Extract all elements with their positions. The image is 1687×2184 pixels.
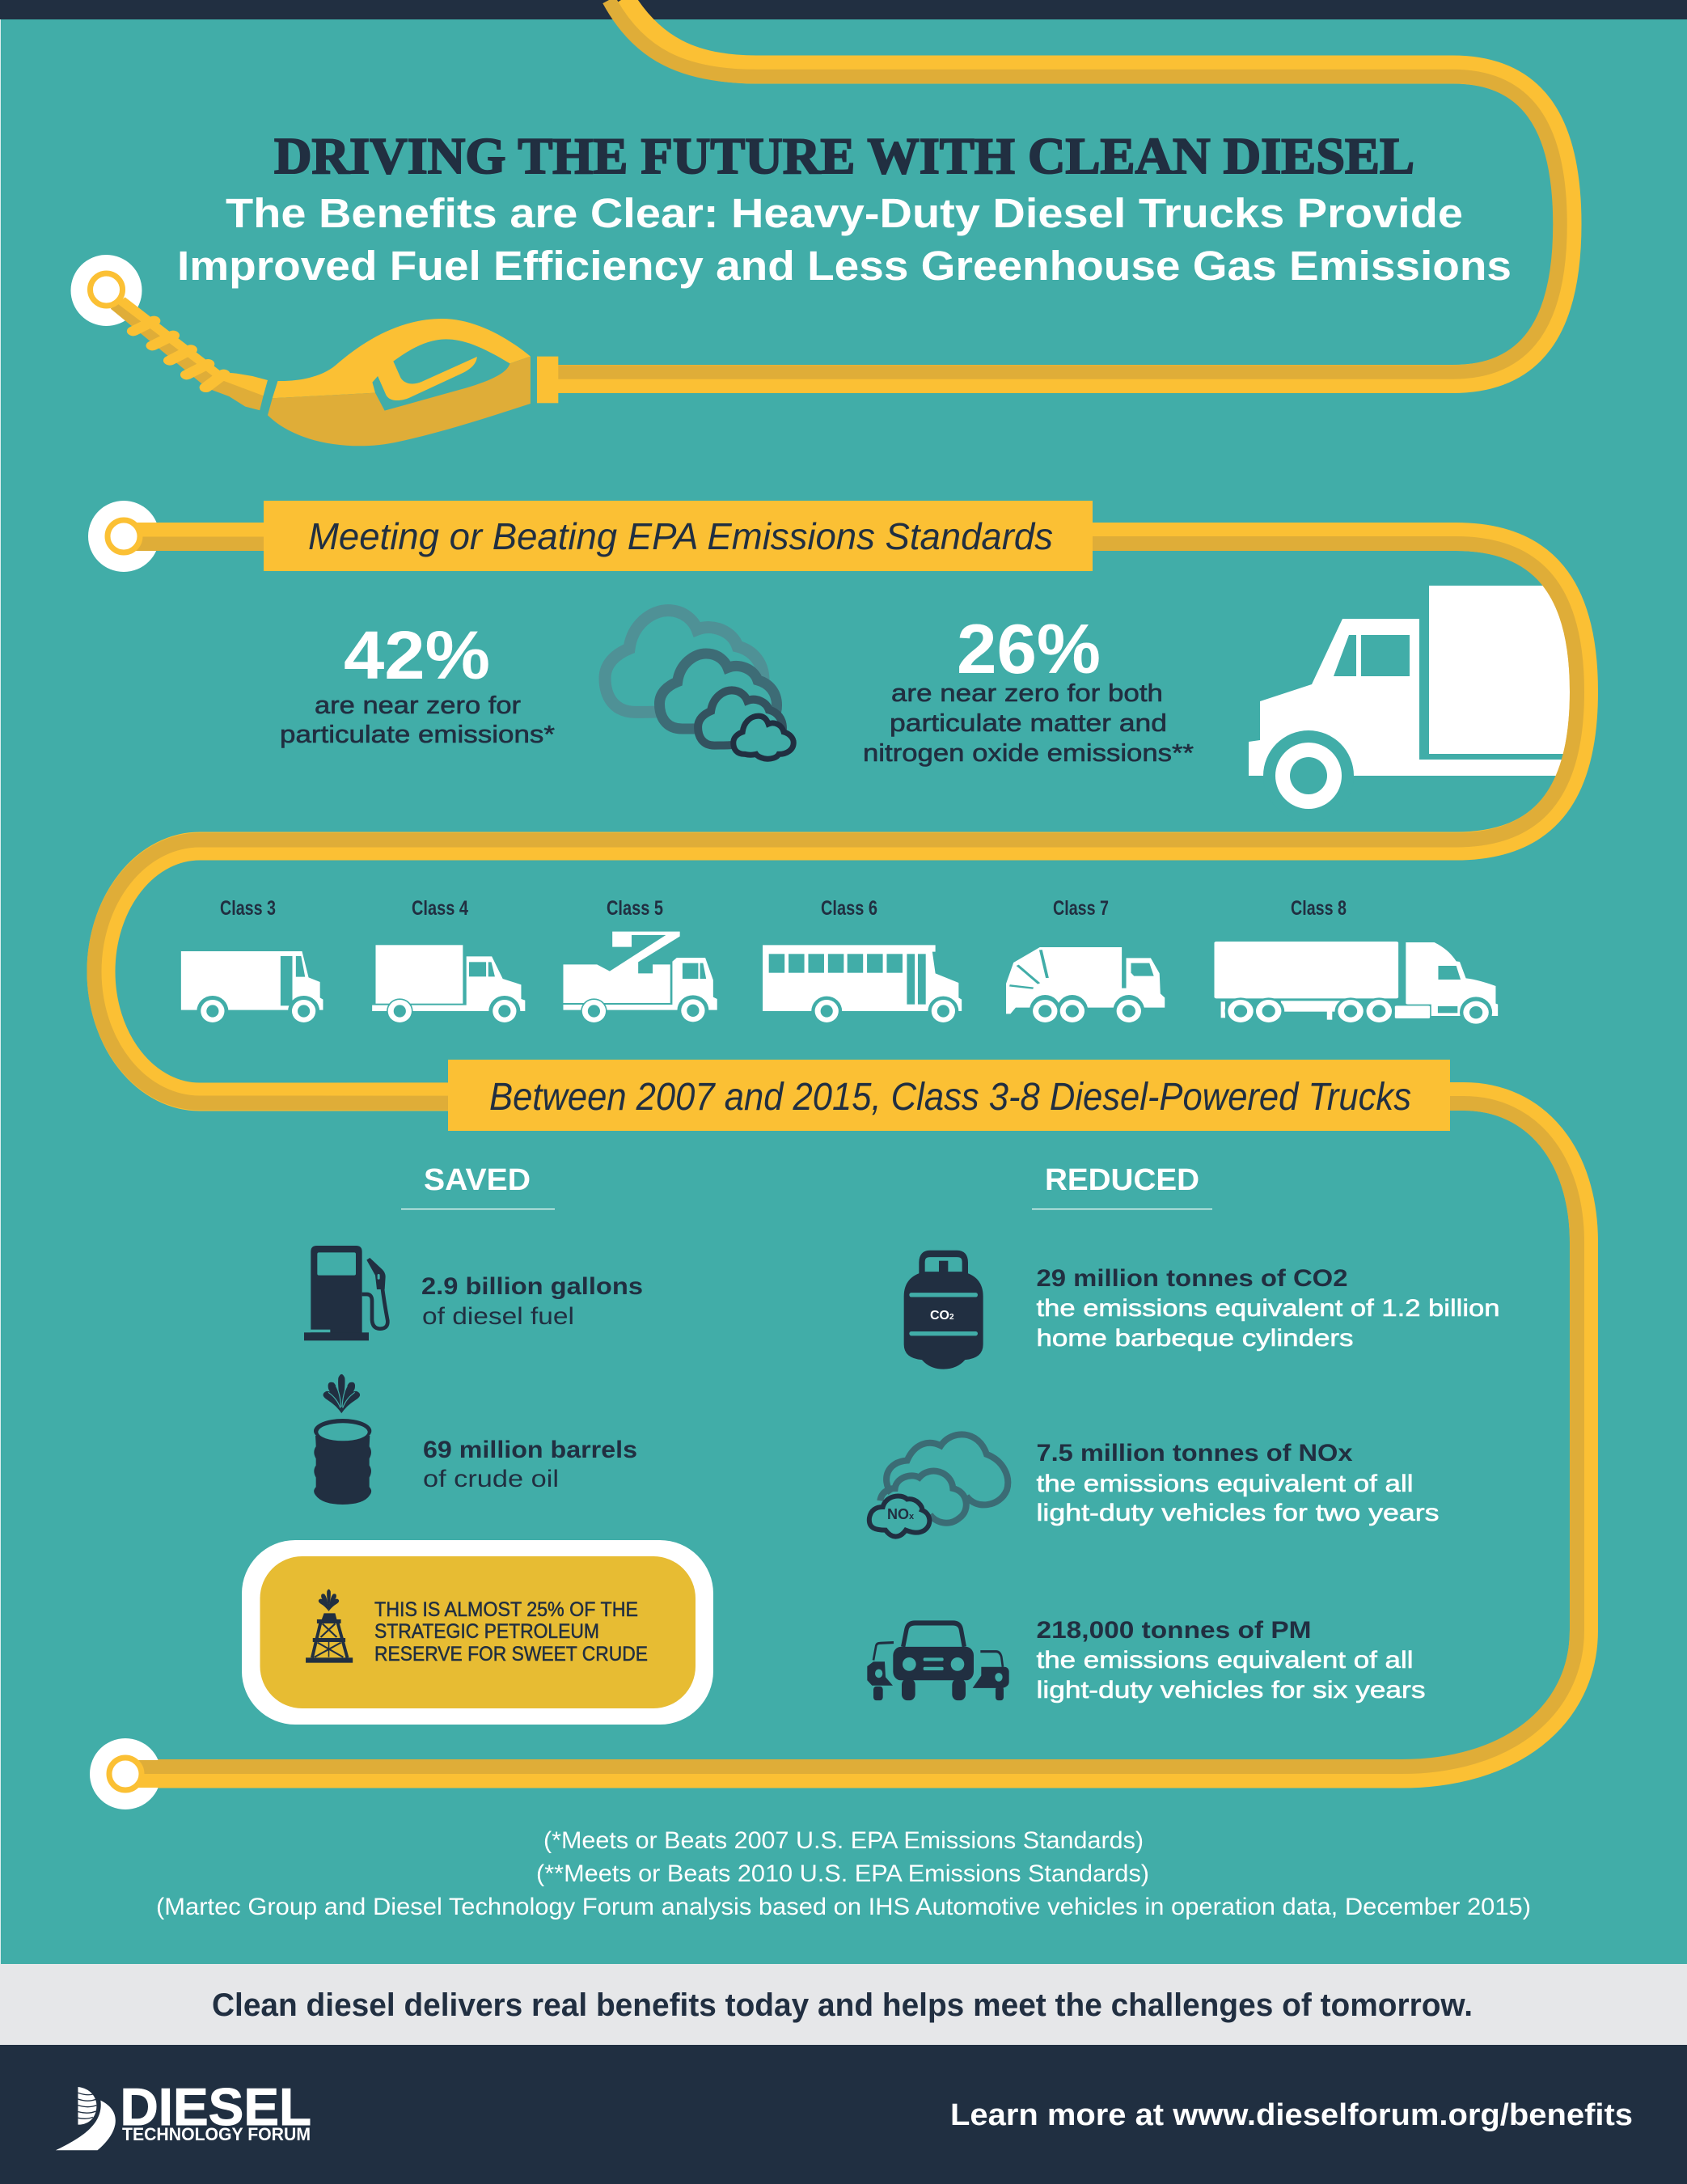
stat: 42 percent: are near zero for	[315, 691, 521, 719]
tagline band: Clean diesel delivers real benefits today and helps meet the challenges of tomorrow.	[212, 1987, 1473, 2023]
text: diesel saved: of diesel fuel	[422, 1303, 574, 1330]
icon: class 3 truck	[181, 951, 323, 1026]
icon: fuel nozzle and hose	[71, 255, 558, 446]
footnotes	[156, 1827, 1531, 1920]
icon: CO2 cylinder	[904, 1254, 983, 1369]
icon: class 8 tractor trailer	[1214, 942, 1498, 1028]
footer	[0, 2045, 1687, 2184]
footnotes: (*Meets or Beats 2007 U.S. EPA Emissions Standards)	[543, 1827, 1144, 1854]
serpentine pipe	[94, 537, 1583, 1774]
callout text: STRATEGIC PETROLEUM	[374, 1620, 599, 1643]
text: CO2 reduced: the emissions equivalent of 1.2 billion	[1037, 1295, 1499, 1322]
text: PM reduced: 218,000 tonnes of PM	[1037, 1617, 1312, 1644]
stat: 26 percent: nitrogen oxide emissions**	[863, 739, 1194, 767]
text: CO2 reduced: 29 million tonnes of CO2	[1037, 1265, 1347, 1292]
class labels: Class 7	[1053, 897, 1109, 920]
text: diesel saved: 2.9 billion gallons	[421, 1273, 643, 1300]
icon: cars	[867, 1623, 1009, 1700]
icon: oil derrick	[306, 1589, 353, 1663]
icon: CO2 cylinder: CO2	[930, 1309, 954, 1323]
icon: NOx clouds	[869, 1434, 1008, 1537]
icon: ring end of pipe	[90, 1738, 267, 1809]
icon: class 7 garbage truck	[1006, 947, 1165, 1027]
text: diesel saved	[421, 1273, 643, 1330]
stat: 26 percent: particulate matter and	[890, 709, 1167, 737]
class labels: Class 5	[607, 897, 663, 920]
subtitle: Improved Fuel Efficiency and Less Greenhouse Gas Emissions	[177, 243, 1512, 289]
stat: 26 percent: are near zero for both	[891, 679, 1163, 707]
icon: class 6 school bus	[763, 945, 962, 1026]
text: PM reduced: the emissions equivalent of all	[1037, 1647, 1414, 1674]
text: CO2 reduced	[1037, 1265, 1499, 1352]
subtitle: The Benefits are Clear: Heavy-Duty Diesel Trucks Provide	[226, 190, 1463, 236]
text: crude saved	[423, 1437, 637, 1492]
icon: fuel pump	[304, 1246, 387, 1340]
callout text: RESERVE FOR SWEET CRUDE	[374, 1643, 648, 1666]
callout text: THIS IS ALMOST 25% OF THE	[374, 1598, 638, 1621]
big white truck	[1249, 586, 1573, 821]
footnotes: (**Meets or Beats 2010 U.S. EPA Emissions Standards)	[536, 1860, 1149, 1887]
icon: class 5 bucket truck	[563, 932, 717, 1026]
call to action: Learn more at www.dieselforum.org/benefits	[950, 2098, 1633, 2132]
stat: 42 percent: particulate emissions*	[280, 720, 555, 748]
text: NOx reduced	[1037, 1440, 1440, 1526]
banner: EPA standards	[264, 501, 1093, 571]
text: NOx reduced: 7.5 million tonnes of NOx	[1037, 1440, 1353, 1467]
tagline band	[0, 1964, 1687, 2045]
banner: class 3-8 trucks: Between 2007 and 2015, Class 3-8 Diesel-Powered Trucks	[489, 1076, 1411, 1119]
icon: class 4 truck	[372, 945, 525, 1026]
subtitle	[177, 190, 1512, 289]
icon: oil barrel with splash	[314, 1374, 371, 1505]
text: PM reduced: light-duty vehicles for six years	[1037, 1677, 1425, 1704]
text: PM reduced	[1037, 1617, 1425, 1704]
footnotes: (Martec Group and Diesel Technology Forum analysis based on IHS Automotive vehicles in operation data, December 2015)	[156, 1894, 1531, 1920]
logo: Diesel Technology Forum: TECHNOLOGY FORUM	[122, 2124, 311, 2144]
stat: 42 percent	[280, 617, 555, 748]
text: CO2 reduced: home barbeque cylinders	[1037, 1325, 1354, 1352]
callout text	[374, 1598, 648, 1666]
text: crude saved: of crude oil	[423, 1466, 559, 1492]
text: NOx reduced: light-duty vehicles for two years	[1037, 1500, 1440, 1526]
callout: strategic petroleum reserve	[242, 1540, 713, 1725]
logo: Diesel Technology Forum	[56, 2077, 311, 2150]
class labels: Class 4	[412, 897, 468, 920]
icon: ring start of pipe	[88, 501, 265, 572]
top bar	[0, 0, 1687, 19]
class labels	[220, 897, 1347, 920]
text: NOx reduced: the emissions equivalent of all	[1037, 1471, 1414, 1497]
banner: EPA standards: Meeting or Beating EPA Emissions Standards	[308, 515, 1053, 557]
stat: 26 percent: 26%	[957, 611, 1101, 688]
title: DRIVING THE FUTURE WITH CLEAN DIESEL	[274, 127, 1414, 184]
icon: fading clouds	[605, 611, 793, 759]
stat: 42 percent: 42%	[344, 617, 490, 693]
text: crude saved: 69 million barrels	[423, 1437, 637, 1463]
stat: 26 percent	[863, 611, 1194, 767]
top pipe loop	[554, 0, 1567, 379]
icon: NOx clouds: NOx	[887, 1506, 915, 1522]
heading: saved: SAVED	[424, 1163, 531, 1197]
class labels: Class 8	[1291, 897, 1347, 920]
class labels: Class 3	[220, 897, 276, 920]
banner: class 3-8 trucks	[448, 1060, 1450, 1131]
logo: Diesel Technology Forum: DIESEL	[120, 2077, 311, 2136]
heading: reduced: REDUCED	[1045, 1163, 1199, 1197]
class labels: Class 6	[821, 897, 877, 920]
